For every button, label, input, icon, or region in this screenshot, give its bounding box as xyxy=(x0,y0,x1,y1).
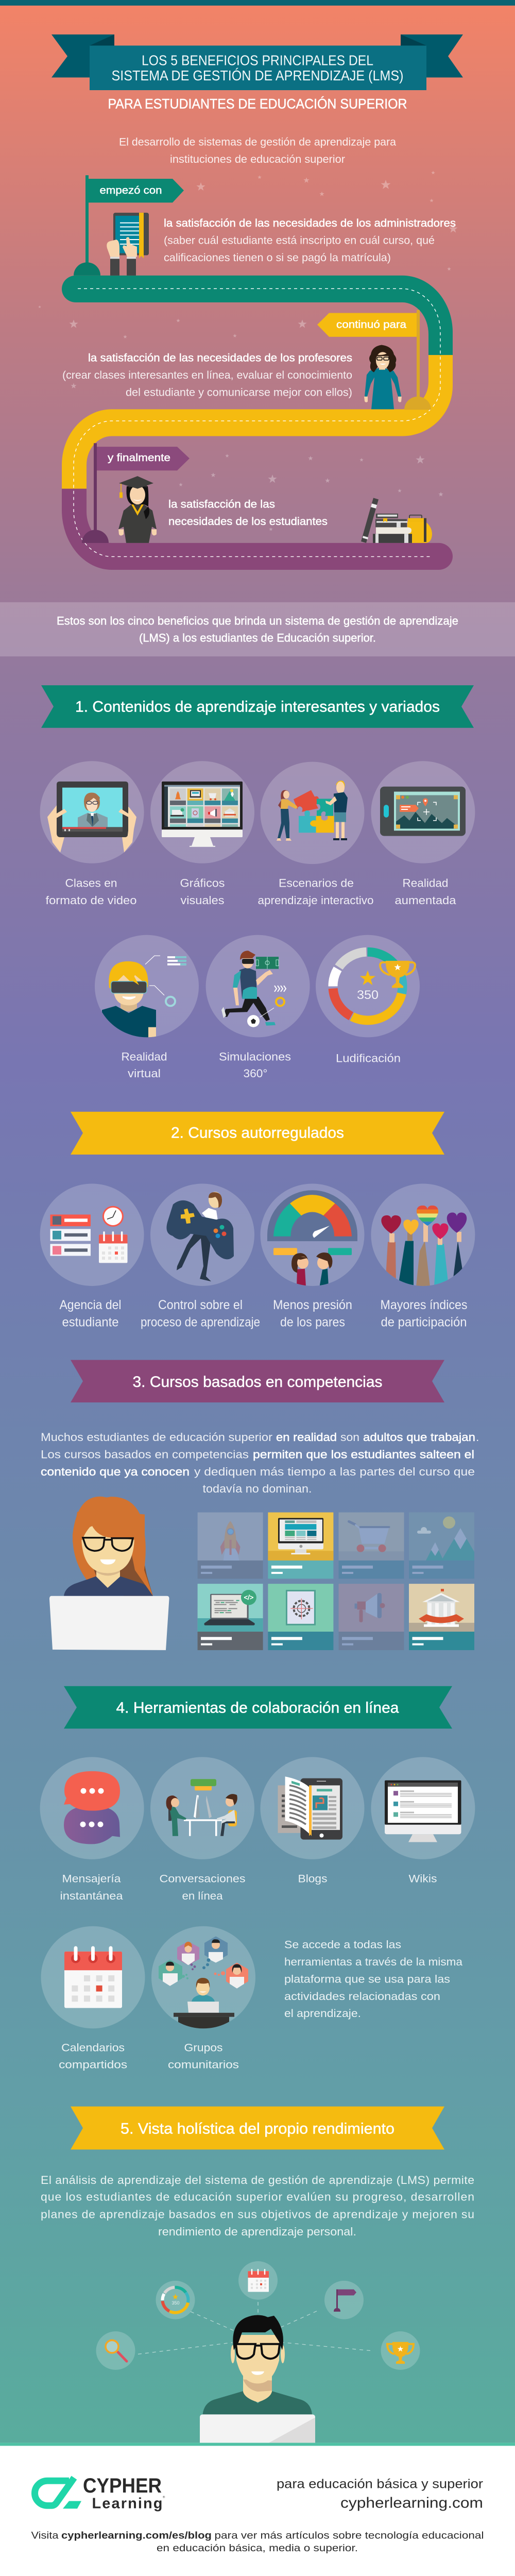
panel: control sobre el proceso de aprendizaje xyxy=(141,1183,260,1329)
text: competencias paragraph: permiten que los estudiantes salteen el xyxy=(253,1448,474,1461)
panel: mensajería instantánea xyxy=(40,1757,144,1902)
icon: teacher xyxy=(364,345,402,409)
text: competencias paragraph: y dediquen más tiempo a las partes del curso que xyxy=(194,1465,475,1478)
banner: five benefits: Estos son los cinco beneficios que brinda un sistema de gestión de aprendizaje xyxy=(57,614,458,628)
intro text: El desarrollo de sistemas de gestión de aprendizaje para xyxy=(119,135,397,148)
tile: laptop code xyxy=(198,1584,263,1650)
heading 1: 1. Contenidos de aprendizaje interesantes y variados xyxy=(75,699,440,715)
icon: star xyxy=(360,971,375,985)
label: Mensajería xyxy=(62,1872,121,1885)
tile: cart xyxy=(339,1513,404,1579)
text: platform note: Se accede a todas las xyxy=(284,1938,401,1951)
heading 3: 3. Cursos basados en competencias xyxy=(133,1374,383,1391)
icon: small calendar xyxy=(238,2261,278,2300)
logo foot xyxy=(63,2501,81,2509)
icon: small flag xyxy=(324,2281,364,2319)
text: competencias paragraph: en realidad xyxy=(276,1430,337,1444)
icon: calendar xyxy=(64,1948,122,2008)
label xyxy=(141,1298,260,1329)
footer tagline: cypherlearning.com xyxy=(340,2495,483,2511)
tile: rocket xyxy=(198,1513,263,1579)
flag: empezó con xyxy=(74,175,184,276)
text: estudiantes: la satisfacción de las xyxy=(168,498,275,511)
label: visuales xyxy=(180,893,225,907)
icon: score ring xyxy=(156,2281,195,2319)
panel: grupos comunitarios xyxy=(151,1926,255,2071)
logo wordmark: ® xyxy=(163,2496,165,2499)
title text xyxy=(111,53,404,83)
label: Agencia del xyxy=(60,1298,122,1312)
tile: institution xyxy=(409,1584,474,1650)
connector lines xyxy=(138,2302,370,2354)
text: competencias paragraph: Muchos estudiantes de educación superior xyxy=(41,1430,272,1444)
text: administradores: calificaciones tienen o si se pagó la matrícula) xyxy=(164,251,391,264)
text: competencias paragraph xyxy=(41,1430,479,1495)
label: en línea xyxy=(182,1889,223,1902)
panel: ludificación xyxy=(316,935,420,1065)
tile: monitor xyxy=(268,1513,333,1579)
heading 3 xyxy=(71,1360,444,1402)
icon: tablet with video xyxy=(47,782,136,853)
label xyxy=(273,1298,352,1329)
icon: speech bubbles and two peers xyxy=(273,1248,352,1286)
label: Menos presión xyxy=(273,1298,352,1312)
illustration: man with glasses and laptop xyxy=(200,2315,315,2443)
tile: mountains xyxy=(409,1513,474,1579)
label: Clases en xyxy=(65,876,117,889)
text: competencias paragraph: . xyxy=(476,1430,479,1444)
text: competencias paragraph: adultos que trabajan xyxy=(363,1430,475,1444)
panel: gráficos visuales xyxy=(150,761,254,907)
label: Mayores índices xyxy=(381,1298,468,1312)
label xyxy=(121,1050,167,1080)
text: platform note: plataforma que se usa para las xyxy=(284,1973,450,1985)
text: analytics paragraph: planes de aprendizaje basados en sus objetivos de aprendizaje y mejoren su xyxy=(41,2208,474,2221)
title text: LOS 5 BENEFICIOS PRINCIPALES DEL xyxy=(142,53,373,68)
text: profesores: la satisfacción de las necesidades de los profesores xyxy=(88,351,352,364)
heading 5: 5. Vista holística del propio rendimiento xyxy=(121,2121,394,2137)
label: Simulaciones xyxy=(219,1050,291,1063)
icon: football VR player xyxy=(221,951,286,1027)
icon: person carrying game controller xyxy=(166,1192,234,1281)
logo mark xyxy=(35,2478,74,2505)
label: Blogs xyxy=(298,1872,328,1885)
logo xyxy=(35,2473,165,2512)
label: virtual xyxy=(128,1066,161,1080)
footer call to action: en educación básica, media o superior. xyxy=(157,2543,358,2554)
label xyxy=(258,876,374,907)
label xyxy=(45,876,136,907)
panel: blogs xyxy=(261,1757,365,1885)
label: Realidad xyxy=(403,876,449,889)
icon: score ring: 350 xyxy=(171,2300,180,2306)
label: instantánea xyxy=(60,1889,123,1902)
logo wordmark xyxy=(83,2473,165,2512)
illustration: woman with laptop xyxy=(49,1497,169,1650)
heading 4: 4. Herramientas de colaboración en línea xyxy=(116,1700,399,1716)
label xyxy=(60,1298,122,1329)
label xyxy=(160,1872,246,1902)
icon: person with VR goggles xyxy=(102,961,156,1038)
road: purple segment xyxy=(62,489,453,570)
text: competencias paragraph: Los cursos basados en competencias xyxy=(41,1448,249,1461)
label: Conversaciones xyxy=(160,1872,246,1885)
tile: laptop code: </> xyxy=(244,1594,253,1601)
icon: graduate xyxy=(118,476,157,543)
heading 1 xyxy=(41,685,474,728)
icon: monitor with tiles xyxy=(162,782,243,847)
label: Wikis xyxy=(409,1872,437,1885)
tile: blueprint gear xyxy=(268,1584,333,1650)
panel: calendarios compartidos xyxy=(41,1926,145,2071)
grid: course tiles xyxy=(198,1513,474,1650)
panel: escenarios de aprendizaje interactivo xyxy=(258,762,374,907)
icon: phone with AR xyxy=(380,787,466,836)
label: Ludificación xyxy=(336,1052,401,1065)
icon: community network xyxy=(159,1936,248,2029)
title text: SISTEMA DE GESTIÓN DE APRENDIZAJE (LMS) xyxy=(111,67,404,83)
text: platform note xyxy=(284,1938,463,2020)
label: Control sobre el xyxy=(158,1298,243,1312)
icon: chat bubbles xyxy=(64,1771,120,1844)
heading 2: 2. Cursos autorregulados xyxy=(171,1125,344,1142)
icon: cards, clock and calendar xyxy=(50,1206,128,1263)
panel: realidad aumentada xyxy=(371,761,475,907)
chart: gamification ring xyxy=(333,952,403,1020)
title ribbon xyxy=(52,35,463,90)
flag: y finalmente: y finalmente xyxy=(108,452,170,464)
panel: conversaciones en línea xyxy=(150,1757,254,1902)
icon: two people at desks xyxy=(166,1779,237,1836)
label: comunitarios xyxy=(168,2058,239,2071)
icon: tablet and hands xyxy=(107,213,149,276)
panel: mayores índices de participación xyxy=(371,1183,475,1329)
label: Escenarios de xyxy=(279,876,354,889)
label: aumentada xyxy=(395,893,456,907)
label: Grupos xyxy=(184,2041,223,2054)
panel: wikis xyxy=(371,1757,475,1885)
label: de participación xyxy=(381,1315,467,1329)
panel: realidad virtual xyxy=(95,935,199,1080)
label xyxy=(168,2041,239,2071)
label: Gráficos xyxy=(180,876,225,889)
label xyxy=(381,1298,468,1329)
label xyxy=(395,876,456,907)
icon: trophy xyxy=(380,961,415,988)
icon: wiki monitor xyxy=(385,1781,461,1842)
panel: menos presión de los pares xyxy=(261,1183,365,1329)
footer call to action: cypherlearning.com/es/blog xyxy=(61,2530,212,2541)
text: platform note: herramientas a través de la misma xyxy=(284,1955,463,1968)
footer call to action: Visita xyxy=(31,2530,59,2541)
text: analytics paragraph xyxy=(41,2173,474,2238)
label: aprendizaje interactivo xyxy=(258,893,374,907)
text: profesores: del estudiante y comunicarse mejor con ellos) xyxy=(126,386,352,398)
label: 360° xyxy=(243,1066,267,1080)
icon: VR data overlays xyxy=(145,956,186,1006)
label xyxy=(219,1050,291,1080)
banner: five benefits: (LMS) a los estudiantes de Educación superior. xyxy=(139,631,376,645)
text: estudiantes xyxy=(168,498,328,528)
footer tagline: para educación básica y superior xyxy=(277,2478,483,2491)
flag: continuó para: continuó para xyxy=(336,319,406,331)
footer call to action xyxy=(31,2530,484,2554)
icon: puzzle and two people xyxy=(277,781,348,841)
banner: five benefits xyxy=(0,602,515,656)
decorative stars xyxy=(38,171,458,531)
text: administradores: la satisfacción de las necesidades de los administradores xyxy=(164,216,456,229)
heading 4 xyxy=(64,1686,452,1728)
text: profesores: (crear clases interesantes en línea, evaluar el conocimiento xyxy=(62,368,352,381)
heading 5 xyxy=(71,2107,444,2149)
footer tagline xyxy=(277,2478,483,2511)
icon: tablet and open book xyxy=(278,1776,342,1840)
top bar xyxy=(0,0,515,6)
text: analytics paragraph: rendimiento de aprendizaje personal. xyxy=(158,2225,356,2238)
label: estudiante xyxy=(62,1315,119,1329)
text: analytics paragraph: El análisis de aprendizaje del sistema de gestión de aprendizaje (LMS) permite xyxy=(41,2173,474,2187)
text: administradores: (saber cuál estudiante está inscripto en cuál curso, qué xyxy=(164,234,435,246)
score: 350 xyxy=(357,988,379,1002)
footer call to action: para ver más artículos sobre tecnología educacional xyxy=(215,2530,484,2541)
footer white area xyxy=(0,2443,515,2576)
road: teal segment xyxy=(62,276,453,355)
logo wordmark: CYPHER xyxy=(83,2473,162,2497)
panel: agencia del estudiante xyxy=(40,1183,144,1329)
icon: books and satchel xyxy=(361,498,432,543)
flag: y finalmente xyxy=(82,443,190,543)
label: Calendarios xyxy=(61,2041,125,2054)
label: formato de video xyxy=(45,893,137,907)
label: de los pares xyxy=(280,1315,345,1329)
text: competencias paragraph: contenido que ya conocen xyxy=(41,1465,190,1478)
text: administradores xyxy=(164,216,456,264)
icon: raised hands with hearts xyxy=(381,1206,467,1286)
text: platform note: actividades relacionadas con xyxy=(284,1990,440,2003)
text: profesores xyxy=(62,351,352,398)
panel: simulaciones 360 xyxy=(206,935,310,1080)
road: yellow segment xyxy=(62,355,453,489)
logo wordmark: Learning xyxy=(92,2496,163,2512)
label: compartidos xyxy=(59,2058,127,2071)
intro text: instituciones de educación superior xyxy=(170,152,345,165)
intro text xyxy=(119,135,397,165)
text: estudiantes: necesidades de los estudiantes xyxy=(168,515,328,528)
label xyxy=(60,1872,123,1902)
flag: continuó para xyxy=(317,310,431,410)
label: proceso de aprendizaje xyxy=(141,1315,260,1329)
panel: clases en formato de video xyxy=(40,761,144,907)
text: platform note: el aprendizaje. xyxy=(284,2007,361,2020)
heading 2 xyxy=(71,1112,444,1155)
road centre dashes xyxy=(74,289,440,556)
label xyxy=(180,876,225,907)
flag: empezó con: empezó con xyxy=(100,184,162,196)
winding road xyxy=(62,276,453,570)
label: Realidad xyxy=(121,1050,167,1063)
tile: megaphone xyxy=(339,1584,404,1650)
label xyxy=(59,2041,127,2071)
icon: pressure gauge xyxy=(267,1190,357,1241)
text: competencias paragraph: son xyxy=(340,1430,359,1444)
subtitle: PARA ESTUDIANTES DE EDUCACIÓN SUPERIOR xyxy=(108,96,407,111)
icon: magnifier xyxy=(96,2331,135,2370)
text: competencias paragraph: todavía no dominan. xyxy=(202,1482,312,1495)
text: analytics paragraph: que los estudiantes de educación superior evalúen su progreso, desarrollen xyxy=(41,2190,474,2204)
icon: small trophy xyxy=(381,2331,420,2370)
